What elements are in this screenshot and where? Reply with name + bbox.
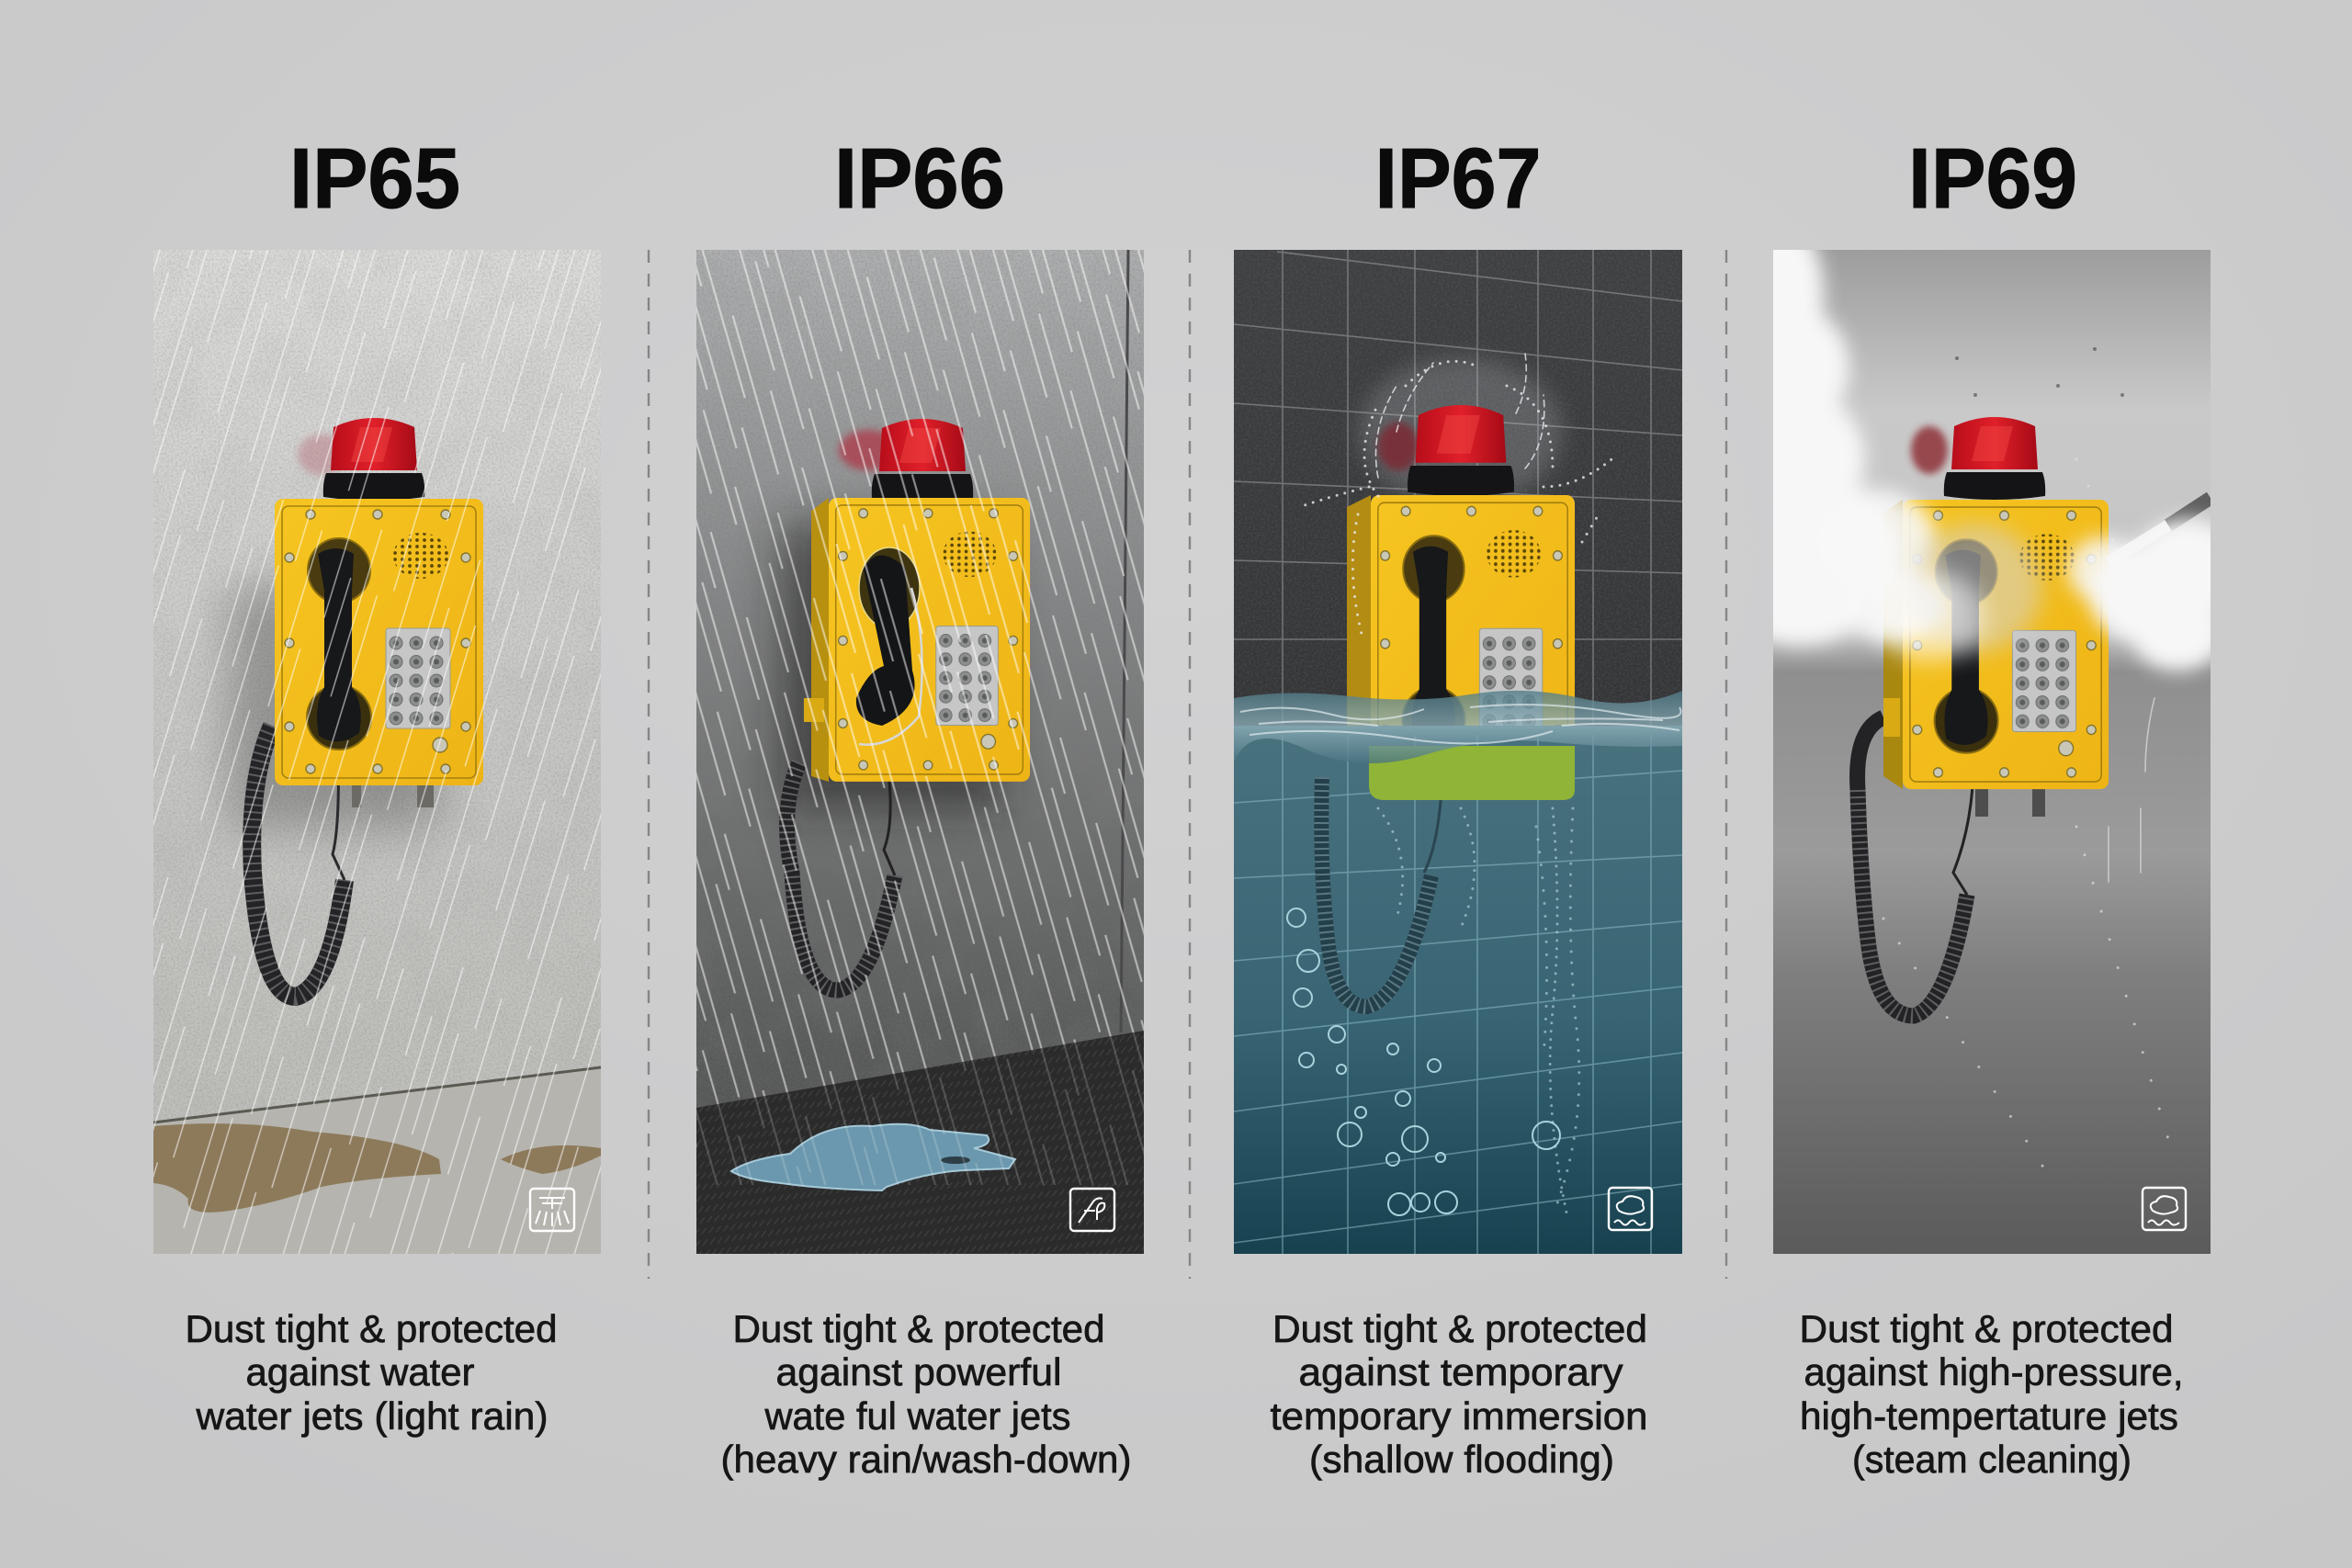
phone above water <box>1347 495 1575 790</box>
cooling droplets <box>1883 459 2168 1176</box>
text block: IP65 description <box>186 1307 557 1438</box>
beacon <box>1408 405 1514 496</box>
puddle stains <box>153 1123 601 1213</box>
heading: IP67: IP67 <box>1374 130 1542 226</box>
text block: IP69 description: high-tempertature jets <box>1800 1394 2178 1438</box>
panel: IP69 steam cleaning <box>1709 216 2242 1254</box>
panel: IP67 immersion in tiled tank <box>1234 250 1682 1254</box>
wall seam <box>1121 250 1128 1032</box>
box side <box>811 498 829 782</box>
splash around beacon <box>1305 354 1617 634</box>
text block: IP67 description: Dust tight & protected <box>1272 1307 1647 1350</box>
text block: IP66 description: (heavy rain/wash-down) <box>720 1438 1132 1481</box>
panel: IP66 heavy rain on dark wall <box>696 250 1144 1254</box>
bubbles <box>1287 908 1560 1215</box>
steam clouds <box>1709 216 2242 671</box>
fizz column <box>1378 808 1579 1213</box>
box side and lug <box>1883 500 1903 789</box>
connectors <box>352 785 434 807</box>
text block: IP69 description: Dust tight & protected <box>1799 1307 2174 1350</box>
panel: IP65 light rain on concrete <box>153 250 601 1254</box>
blurred beacon ghost <box>839 430 898 470</box>
text block: IP69 description: (steam cleaning) <box>1852 1438 2132 1481</box>
heading: IP66: IP66 <box>834 130 1005 226</box>
coiled cord <box>787 762 895 990</box>
beacon <box>323 418 424 501</box>
upper tile grid <box>1234 250 1682 726</box>
phone body <box>1903 500 2109 789</box>
water ripples <box>1240 705 1681 743</box>
connectors <box>1975 789 2045 817</box>
rain <box>153 250 601 1254</box>
text block: IP66 description <box>720 1307 1132 1481</box>
handset <box>1935 539 1998 753</box>
text block: IP66 description: wate ful water jets <box>764 1394 1071 1438</box>
puddle <box>731 1124 1015 1190</box>
coiled cord <box>1858 717 1973 1016</box>
rain on wall <box>696 250 1144 1108</box>
heading: IP69: IP69 <box>1908 130 2077 226</box>
ghost beacon <box>1378 423 1419 470</box>
icon: jet <box>1070 1189 1114 1231</box>
phone body <box>275 499 483 785</box>
beacon <box>872 419 973 502</box>
ghost beacon <box>1911 426 1948 474</box>
spray around beacon <box>298 434 345 475</box>
underwater wall <box>1234 726 1682 1254</box>
phone shadow <box>781 524 1001 808</box>
handset <box>307 538 371 750</box>
phone body <box>829 498 1030 782</box>
text block: IP67 description <box>1270 1307 1648 1481</box>
divider 2 <box>1189 250 1191 1279</box>
handset <box>856 547 922 745</box>
steam over handset <box>1874 524 2041 661</box>
text block: IP65 description: against water <box>246 1350 475 1393</box>
submerged coiled cord <box>1321 777 1442 1007</box>
splash haze <box>1360 358 1562 505</box>
lower tile grid <box>1234 735 1682 1254</box>
icon: steam cloud <box>2143 1188 2186 1230</box>
text block: IP65 description: water jets (light rain) <box>195 1394 548 1438</box>
icon: submersion cloud <box>1609 1188 1652 1230</box>
text block: IP65 description: Dust tight & protected <box>186 1307 557 1350</box>
heading: IP65: IP65 <box>289 130 460 226</box>
text block: IP66 description: against powerful <box>775 1350 1062 1393</box>
text block: IP67 description: temporary immersion <box>1270 1394 1648 1438</box>
floor <box>696 1031 1144 1254</box>
nozzle <box>2109 498 2211 562</box>
text block: IP66 description: Dust tight & protected <box>733 1307 1104 1350</box>
icon: spray <box>530 1189 574 1231</box>
lug <box>804 698 824 722</box>
divider 1 <box>648 250 650 1279</box>
floor <box>153 1067 601 1254</box>
text block: IP69 description: against high-pressure, <box>1804 1350 2183 1393</box>
coiled cord <box>252 726 345 997</box>
text block: IP69 description <box>1799 1307 2183 1481</box>
phone shadow <box>230 588 441 827</box>
beacon <box>1944 417 2045 500</box>
rain on floor <box>696 1031 1144 1185</box>
text block: IP67 description: against temporary <box>1299 1350 1623 1393</box>
divider 3 <box>1725 250 1727 1279</box>
water surface <box>1234 691 1682 763</box>
text block: IP67 description: (shallow flooding) <box>1309 1438 1614 1481</box>
submerged phone bottom <box>1369 746 1575 800</box>
